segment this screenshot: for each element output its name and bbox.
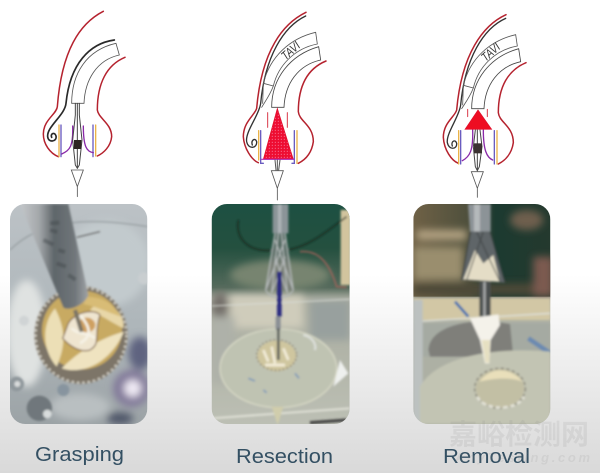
- mesh cage: [267, 233, 293, 290]
- valve frame bars: [59, 125, 96, 157]
- valve frame bars: [459, 131, 497, 164]
- catheter shaft: [468, 204, 491, 232]
- diagram: resection: [243, 12, 326, 200]
- blue rod: [277, 272, 282, 317]
- sheath: [472, 49, 521, 109]
- TAVI capture sleeve: [462, 35, 517, 109]
- catheter tip: [71, 170, 83, 197]
- photo: grasping: [7, 204, 152, 424]
- valve in dish: [257, 341, 296, 371]
- watermark: [449, 419, 590, 465]
- catheter cage: [73, 103, 82, 168]
- aorta wall left: [443, 15, 506, 163]
- diagram: grasping: [43, 11, 125, 197]
- valve frame bars: [259, 131, 297, 163]
- grasper shaft: [20, 204, 88, 309]
- guidewire: [447, 18, 506, 148]
- photo: resection: [212, 204, 351, 425]
- guidewire: [247, 16, 306, 147]
- catheter cage: [473, 130, 482, 171]
- diagram: removal: [443, 15, 526, 197]
- catheter tip: [271, 171, 283, 200]
- guidewire: [48, 40, 114, 141]
- grasped core: [474, 143, 482, 153]
- capture cage with valve: [462, 232, 505, 283]
- downward arrows: [268, 113, 287, 127]
- resected tissue cone: [263, 108, 293, 159]
- leaflet base: [262, 158, 294, 161]
- white cone: [470, 314, 500, 363]
- aorta wall right: [298, 61, 326, 163]
- resected tissue cone: [465, 110, 492, 129]
- sheath: [272, 47, 321, 107]
- sheath: [72, 43, 119, 103]
- watermark: 嘉峪检测网: [449, 419, 589, 450]
- leaflet curves: [62, 126, 93, 154]
- stent ring: [34, 286, 128, 384]
- aorta wall left: [43, 11, 103, 157]
- watermark: AnyTesting.com: [454, 450, 590, 465]
- photo: removal: [413, 204, 553, 424]
- TAVI capture sleeve: [262, 32, 317, 107]
- upward arrows: [468, 109, 487, 117]
- valve in dish: [476, 369, 524, 408]
- aorta wall left: [243, 12, 306, 163]
- catheter tip: [471, 172, 483, 197]
- caption: resection: Resection: [236, 446, 333, 468]
- catheter shaft: [273, 204, 288, 233]
- aorta wall right: [498, 63, 526, 164]
- dark rod: [479, 282, 491, 317]
- caption: removal: Removal: [443, 446, 530, 468]
- caption: grasping: Grasping: [35, 444, 124, 466]
- grasped core: [74, 140, 81, 149]
- aorta wall right: [97, 57, 125, 156]
- TAVI label: TAVI: [278, 38, 303, 63]
- TAVI label: TAVI: [478, 40, 503, 64]
- catheter neck: [275, 160, 280, 170]
- leaflet curves: [462, 130, 493, 161]
